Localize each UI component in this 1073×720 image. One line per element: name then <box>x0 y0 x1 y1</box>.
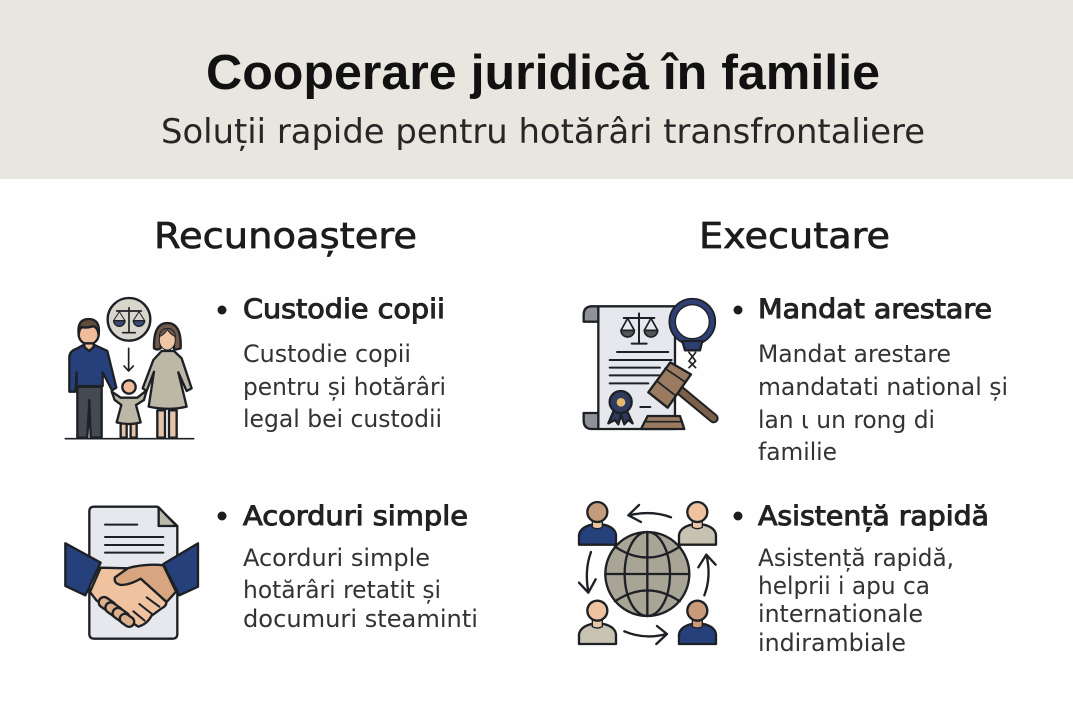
person bottom right <box>679 601 716 644</box>
item text: hotărâri retatit și <box>243 576 441 604</box>
mother <box>157 410 177 438</box>
hands <box>90 568 166 627</box>
item text: indirambiale <box>758 629 906 657</box>
column heading: Executare: Executare <box>699 216 890 257</box>
fingers <box>97 595 136 629</box>
item text <box>758 544 954 657</box>
bullet <box>734 306 742 314</box>
item title: Mandat arestare <box>758 294 992 325</box>
column heading: Recunoaștere: Recunoaștere <box>154 216 417 257</box>
scales circle <box>108 298 150 341</box>
bullet <box>218 512 226 520</box>
subtitle: Soluții rapide pentru hotărâri transfrontaliere <box>161 112 925 152</box>
bullet <box>218 306 226 314</box>
item text: lan ι un rong di <box>758 406 935 434</box>
item text <box>243 544 478 633</box>
item text: documuri steaminti <box>243 605 478 633</box>
item text: Asistență rapidă, <box>758 544 954 572</box>
bullet <box>734 512 742 520</box>
item text: Acorduri simple <box>243 544 430 572</box>
document <box>89 507 177 639</box>
item text: familie <box>758 438 837 466</box>
gavel <box>678 389 714 418</box>
scroll <box>598 306 675 429</box>
icon: document with handshake <box>65 507 198 639</box>
arrow <box>124 348 133 371</box>
item text: Mandat arestare <box>758 340 951 368</box>
arrows <box>628 505 671 522</box>
handcuffs <box>672 302 712 342</box>
item title: Asistență rapidă <box>758 501 989 532</box>
panel: asistență rapidă <box>579 501 989 657</box>
panel: mandat arestare <box>584 294 1008 466</box>
scales <box>624 313 654 344</box>
item title: Custodie copii <box>243 294 445 325</box>
ground <box>65 436 194 441</box>
item text: pentru și hotărâri <box>243 373 446 401</box>
person top left <box>579 502 616 545</box>
item text: mandatati national și <box>758 373 1008 401</box>
item text <box>243 340 446 433</box>
icon: decree, handcuffs and gavel <box>584 299 715 429</box>
item text: Custodie copii <box>243 340 411 368</box>
icon: family with scales <box>65 298 194 439</box>
child <box>121 423 137 438</box>
panel: acorduri simple <box>65 501 478 639</box>
globe <box>605 532 689 616</box>
person bottom left <box>579 601 616 644</box>
panel: custodie copii <box>65 294 446 439</box>
person top right <box>679 502 716 545</box>
title: Cooperare juridică în familie <box>206 46 880 100</box>
item text <box>758 340 1008 466</box>
header band <box>0 0 1073 179</box>
text lines <box>610 352 672 407</box>
item text: legal bei custodii <box>243 405 442 433</box>
left cuff <box>65 543 101 595</box>
father <box>77 387 102 438</box>
item text: internationale <box>758 600 923 628</box>
item text: helprii i apu ca <box>758 572 930 600</box>
seal <box>608 411 633 424</box>
item title: Acorduri simple <box>243 501 468 532</box>
right cuff <box>163 543 198 595</box>
icon: globe with people and arrows <box>579 502 716 644</box>
